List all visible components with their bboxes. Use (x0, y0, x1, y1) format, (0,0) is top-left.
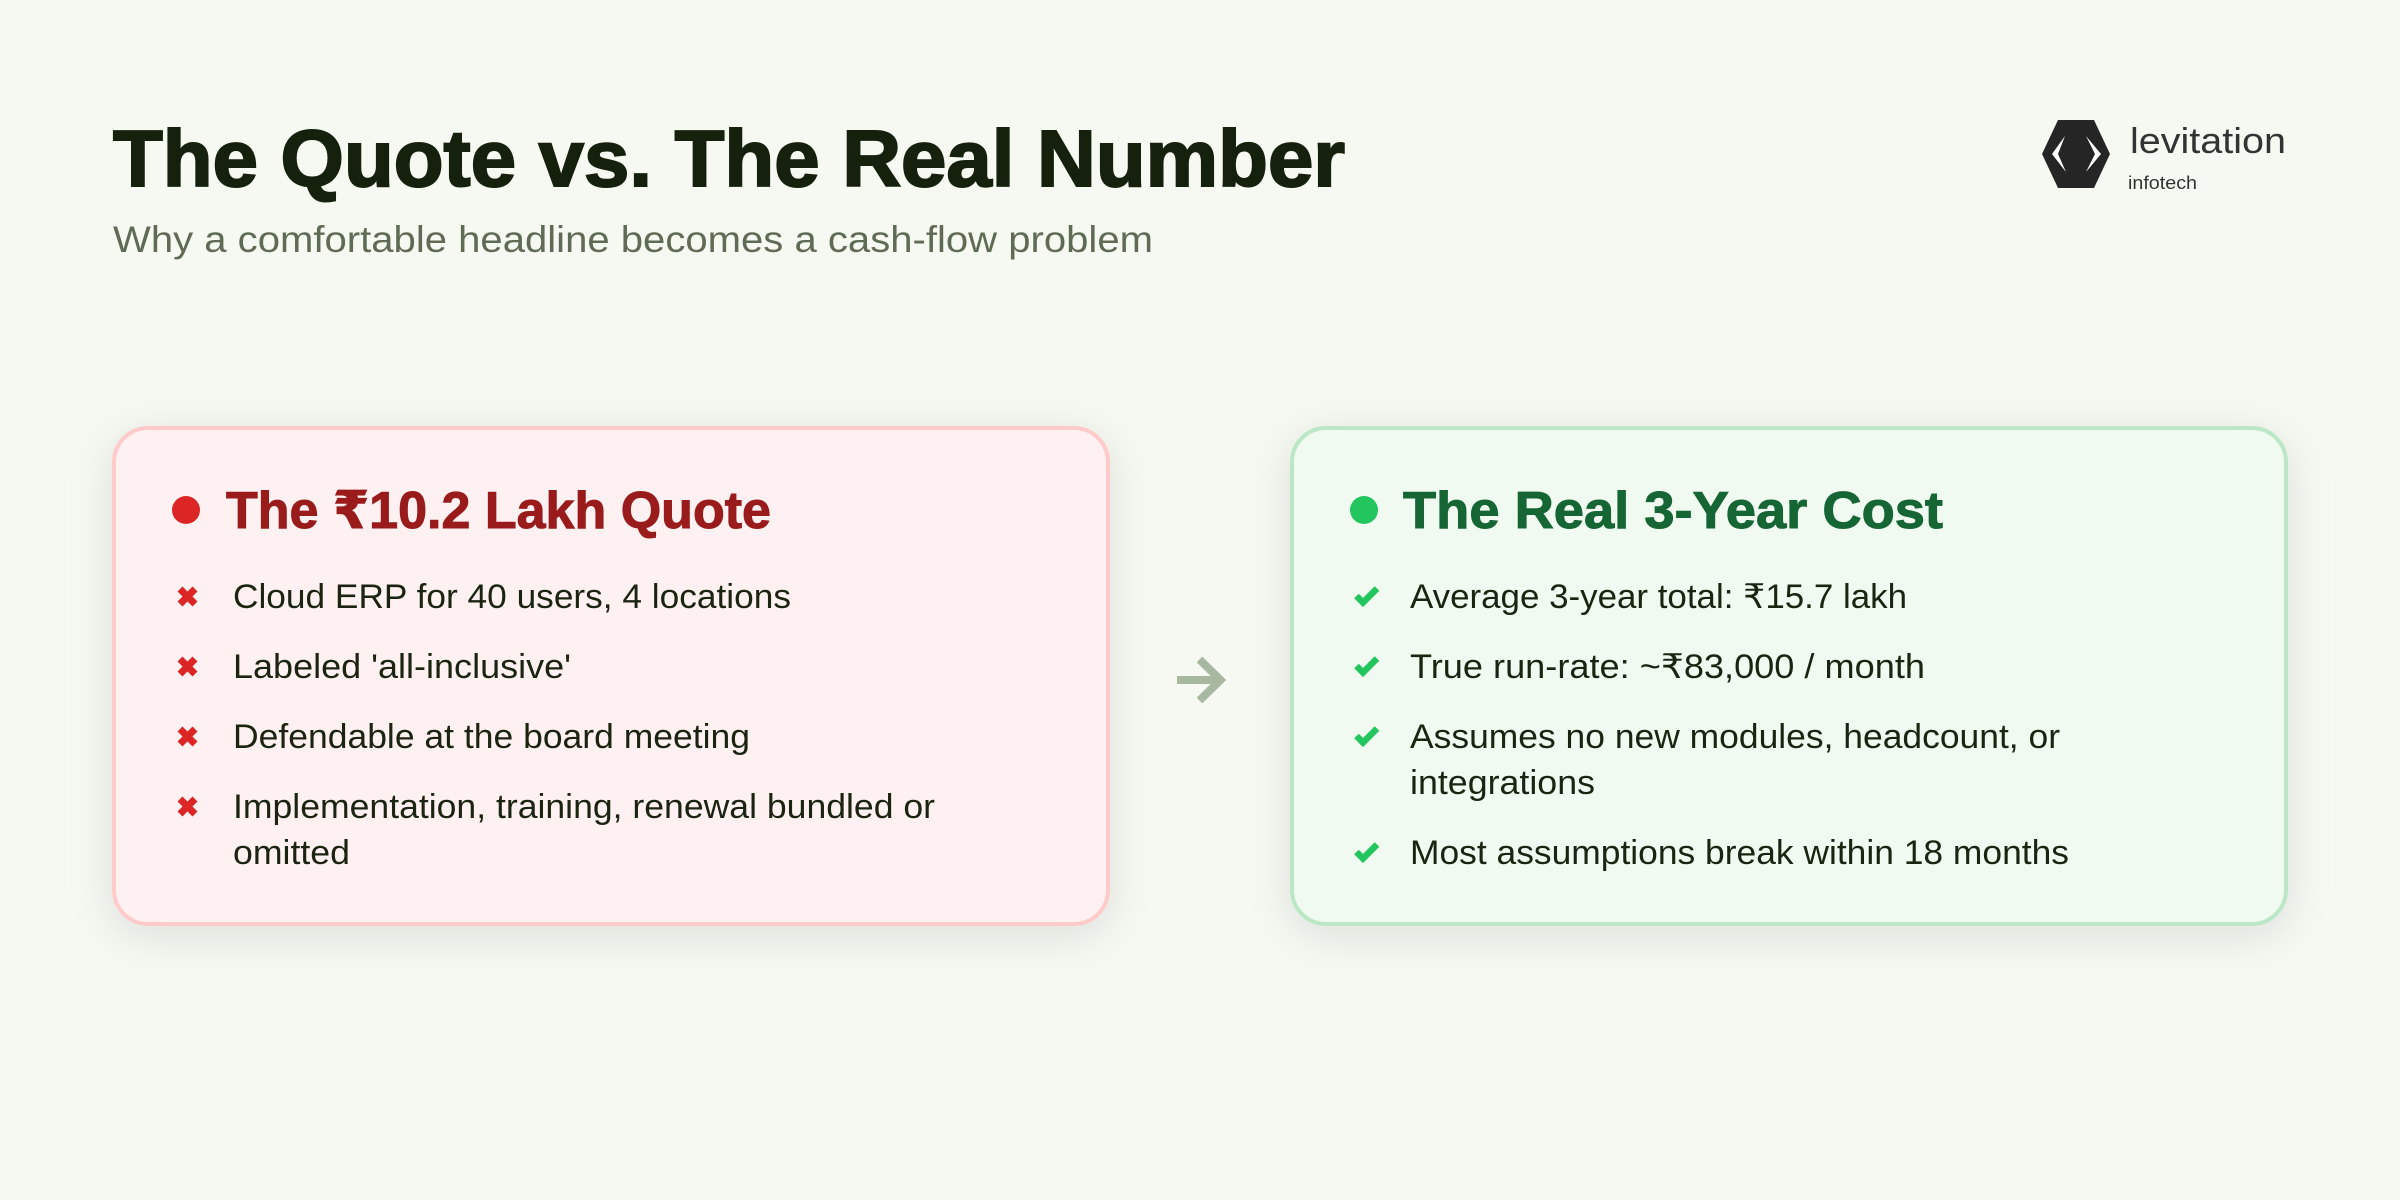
item: multi-line: integrations (1410, 764, 1595, 802)
status dot: red (172, 496, 200, 524)
item: Labeled 'all-inclusive' (233, 648, 571, 686)
logo subtext: infotech (2128, 173, 2197, 193)
icon: check (1356, 728, 1377, 742)
icon: cross (180, 659, 195, 674)
item: Cloud ERP for 40 users, 4 locations (233, 578, 791, 616)
item: True run-rate: ~₹83,000 / month (1410, 648, 1925, 686)
heading: real cost: The Real 3-Year Cost (1403, 482, 1943, 540)
icon: check (1356, 658, 1377, 672)
icon: cross (180, 729, 195, 744)
item: multi-line: Implementation, training, renewal bundled or (233, 788, 935, 826)
item: Average 3-year total: ₹15.7 lakh (1410, 578, 1907, 616)
icon: cross (180, 799, 195, 814)
arrow (1177, 660, 1220, 700)
item: multi-line: Assumes no new modules, headcount, or (1410, 718, 2060, 756)
icon: hexagon with chevrons (2042, 120, 2110, 188)
logo wordmark: levitation (2130, 120, 2286, 161)
item: Defendable at the board meeting (233, 718, 750, 756)
item: Most assumptions break within 18 months (1410, 834, 2069, 872)
status dot: green (1350, 496, 1378, 524)
icon: check (1356, 588, 1377, 602)
icon: cross (180, 589, 195, 604)
panel: the real cost (1292, 428, 2286, 924)
icon: check (1356, 844, 1377, 858)
logo: levitation infotech (2042, 120, 2286, 193)
panel: the quote (114, 428, 1108, 924)
heading: quote: The ₹10.2 Lakh Quote (226, 482, 771, 540)
item: multi-line: omitted (233, 834, 350, 872)
subtitle: Why a comfortable headline becomes a cash-flow problem (113, 219, 1153, 260)
title: The Quote vs. The Real Number (113, 114, 1345, 203)
